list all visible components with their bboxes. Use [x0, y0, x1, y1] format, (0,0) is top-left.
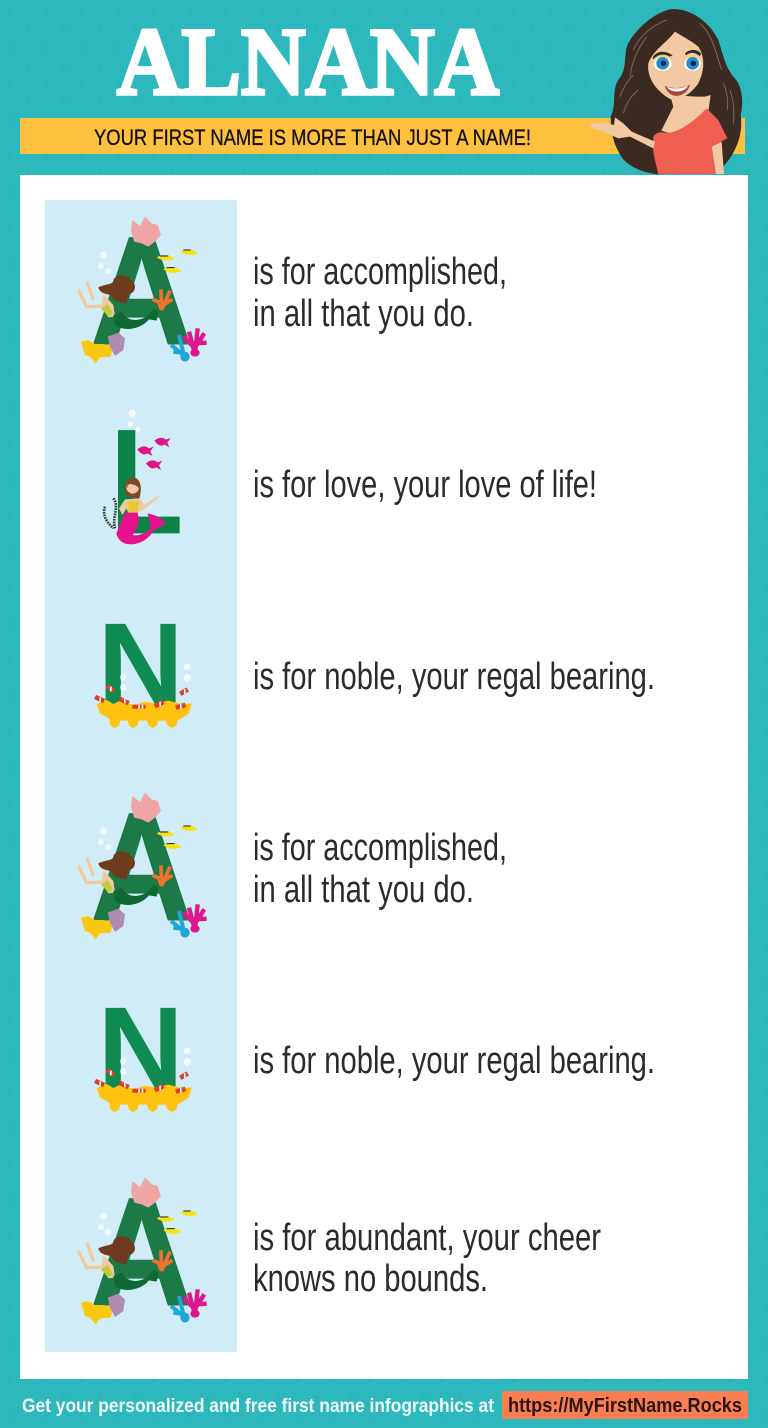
letter N illustration: N: [98, 599, 184, 731]
statement: L is for love: is for love, your love of life!: [253, 464, 597, 506]
statement: N is for noble: is for noble, your regal bearing.: [253, 656, 655, 698]
letter N illustration: N: [98, 983, 184, 1115]
statement: A is for abundant: [253, 1217, 601, 1300]
statement: N is for noble (second): is for noble, your regal bearing.: [253, 1040, 655, 1082]
footer text: Get your personalized and free first name infographics at: [22, 1396, 495, 1417]
statement: A is for accomplished: in all that you do.: [253, 293, 474, 335]
statement: A is for accomplished: is for accomplished,: [253, 251, 507, 293]
letter L illustration: L: [110, 397, 183, 565]
white panel: [20, 175, 748, 1379]
statement: A is for accomplished (second): [253, 827, 507, 911]
letter A illustration: A: [91, 1167, 192, 1337]
banner text: YOUR FIRST NAME IS MORE THAN JUST A NAME!: [94, 125, 531, 150]
illustration: woman presenter: [590, 9, 742, 174]
statement: A is for abundant: is for abundant, your cheer: [253, 1217, 601, 1259]
statement: A is for accomplished (second): is for accomplished,: [253, 827, 507, 869]
letter column: [45, 200, 237, 1352]
statement: A is for accomplished (second): in all that you do.: [253, 869, 474, 911]
banner: [20, 118, 745, 154]
letter A illustration: A: [91, 206, 192, 376]
statement: A is for abundant: knows no bounds.: [253, 1258, 488, 1300]
letter A illustration: A: [91, 782, 192, 952]
statement: A is for accomplished: [253, 251, 507, 335]
footer link badge: https://MyFirstName.Rocks: [508, 1395, 742, 1417]
title: ALNANA: [117, 8, 499, 115]
